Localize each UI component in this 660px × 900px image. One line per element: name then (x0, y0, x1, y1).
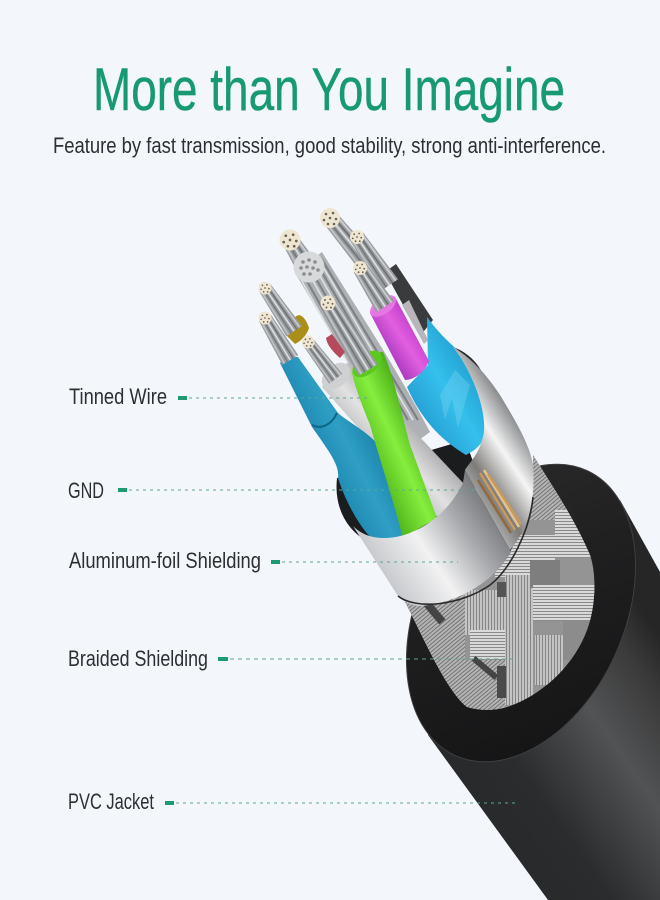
gold strands (478, 470, 521, 533)
foil rim shadow (453, 347, 490, 440)
label: PVC Jacket: PVC Jacket (68, 789, 154, 814)
white wire (317, 357, 465, 520)
yellow wire (286, 315, 309, 344)
black sheath (385, 264, 433, 336)
label: Tinned Wire: Tinned Wire (69, 384, 167, 409)
thin strand by magenta (402, 300, 428, 344)
green wire strand (319, 297, 378, 376)
label: Aluminum-foil Shielding: Aluminum-foil Shielding (69, 548, 261, 573)
interior shadow (337, 440, 480, 540)
aluminum foil front (353, 470, 511, 606)
PVC jacket body (428, 500, 660, 900)
magenta wire (366, 291, 429, 380)
label: Braided Shielding: Braided Shielding (68, 646, 208, 671)
upper left strand (257, 283, 302, 336)
braided shielding (400, 450, 600, 715)
magenta strand (351, 262, 394, 312)
top strands (321, 211, 396, 294)
label: PVC Jacket (68, 789, 516, 814)
green wire (348, 345, 437, 538)
center silver bundle (294, 252, 430, 455)
cable illustration (257, 208, 660, 900)
light blue wire (407, 317, 488, 455)
label: GND (68, 478, 480, 503)
label: Aluminum-foil Shielding (69, 548, 458, 573)
PVC jacket end disc (361, 427, 660, 799)
left rear strand (280, 234, 321, 280)
label: GND: GND (68, 478, 104, 503)
white wire strand (301, 337, 342, 384)
dark red wire (326, 334, 345, 358)
label: Braided Shielding (68, 646, 513, 671)
dark blue wire (280, 357, 407, 540)
aluminum foil inner (453, 347, 534, 550)
label: Tinned Wire (69, 384, 370, 409)
lower left strand (257, 313, 298, 365)
